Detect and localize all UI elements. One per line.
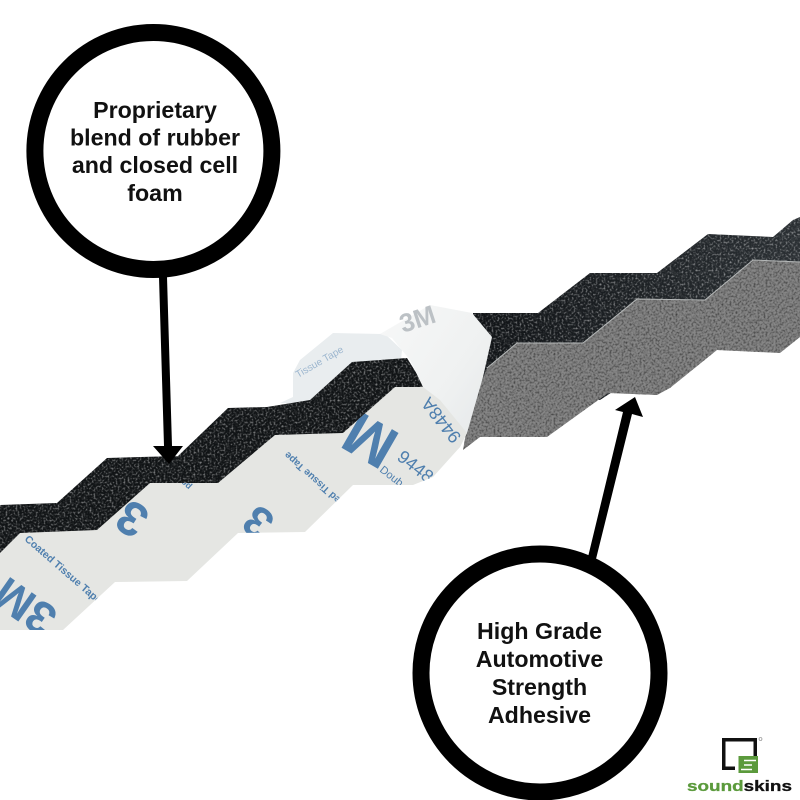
logo wordmark: sound skins (687, 778, 792, 795)
release liner tape with blue 3M print: 3 (107, 489, 158, 548)
foam strip: right section (470, 217, 800, 400)
release liner tape with blue 3M print: Coated Tissue Tape (22, 533, 104, 607)
release liner tape with blue 3M print: ed Tissue Tape (282, 449, 343, 505)
callout text: adhesive: Strength (492, 674, 587, 700)
peeled tape: rear lobe (280, 333, 402, 404)
soundskins logo (687, 738, 792, 795)
release liner tape with blue 3M print: 9448 (394, 446, 437, 487)
release liner tape with blue 3M print: 9448A (417, 394, 465, 447)
release liner tape with blue 3M print: M (332, 399, 408, 482)
adhesive backing: grey exposed layer (463, 260, 800, 450)
callout text: foam: Proprietary (93, 97, 217, 123)
peeled tape: curl: 3M (396, 299, 439, 339)
peeled tape: rear lobe: Tissue Tape (294, 344, 346, 381)
callout text: adhesive: Adhesive (488, 702, 591, 728)
callout text: foam: and closed cell (72, 152, 238, 178)
callout text: foam: blend of rubber (70, 124, 240, 150)
release liner tape with blue 3M print: Doub (377, 464, 405, 490)
callout text: foam: foam (127, 180, 183, 206)
callout text: adhesive: High Grade (477, 618, 602, 644)
release liner tape with blue 3M print (0, 387, 467, 646)
foam strip: left section (0, 358, 430, 560)
peeled tape: curl (380, 299, 492, 470)
arrow: to foam layer (153, 277, 183, 464)
callout circle: foam (35, 32, 272, 270)
arrow: to adhesive layer (588, 397, 643, 559)
release liner tape with blue 3M print: pe (179, 477, 193, 492)
callout text: adhesive: Automotive (476, 646, 603, 672)
logo mark (722, 738, 762, 773)
callout circle: adhesive (421, 554, 659, 792)
release liner tape with blue 3M print: 3 (234, 495, 283, 549)
